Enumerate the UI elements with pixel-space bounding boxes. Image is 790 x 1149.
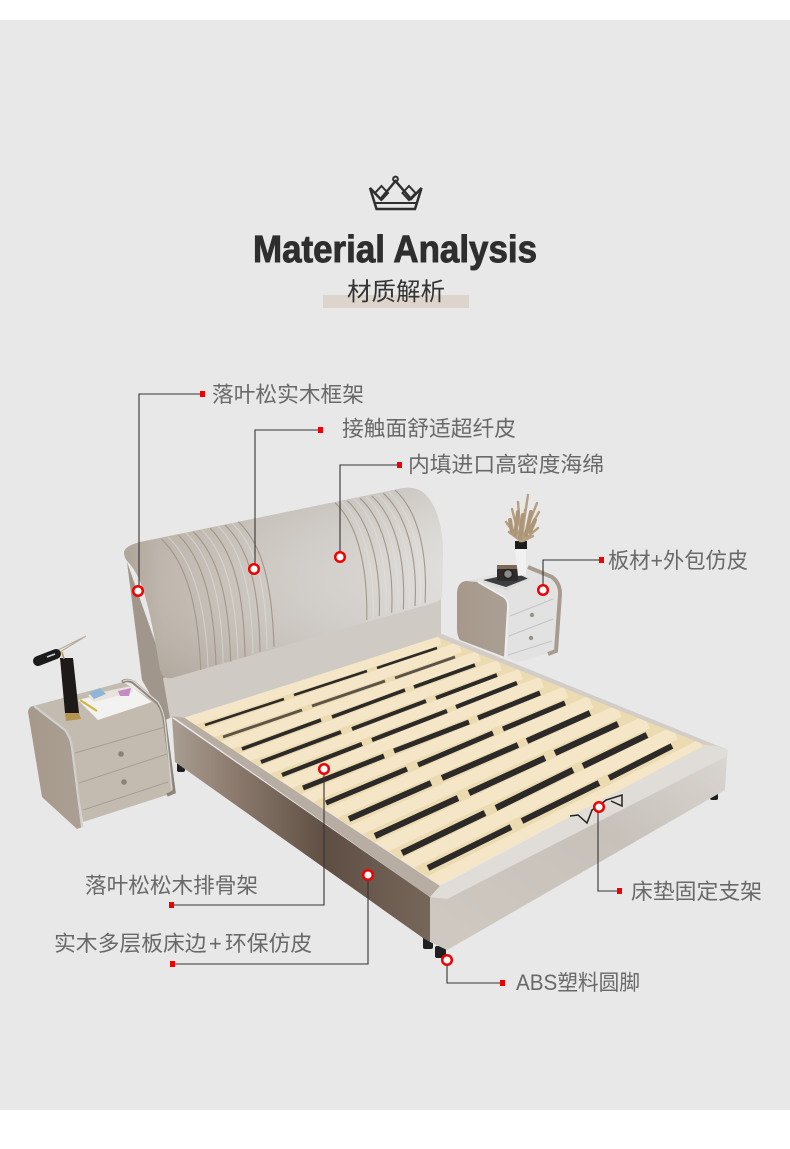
books bbox=[483, 573, 529, 590]
left nightstand bbox=[28, 636, 174, 829]
headboard lower frame bbox=[163, 594, 441, 718]
callout: ABS塑料圆脚 bbox=[442, 955, 640, 995]
nightstand chrome edge bbox=[478, 582, 508, 657]
left side face bbox=[172, 718, 430, 942]
drawer seams bbox=[508, 599, 553, 655]
chrome edges bbox=[34, 706, 82, 827]
title: Material Analysis: Material Analysis bbox=[253, 229, 537, 271]
books bbox=[78, 687, 152, 720]
callout: 内填进口高密度海绵 bbox=[335, 452, 604, 562]
drawer handles bbox=[529, 613, 534, 640]
front side face bbox=[430, 755, 727, 950]
nightstand side bbox=[457, 581, 508, 657]
callout: 床垫固定支架: 床垫固定支架 bbox=[631, 879, 762, 904]
callout: 接触面舒适超纤皮 bbox=[249, 416, 516, 574]
bed feet bbox=[177, 762, 718, 958]
callout: 落叶松实木框架 bbox=[133, 382, 364, 596]
callout: 落叶松实木框架: 落叶松实木框架 bbox=[212, 382, 364, 407]
callout: 内填进口高密度海绵: 内填进口高密度海绵 bbox=[408, 452, 604, 477]
dried pampas bbox=[506, 495, 539, 541]
bed base bbox=[172, 632, 728, 950]
slat gaps bbox=[205, 648, 672, 868]
left rim bbox=[172, 716, 440, 897]
wood base bbox=[185, 637, 705, 885]
callout: 接触面舒适超纤皮: 接触面舒适超纤皮 bbox=[342, 416, 516, 441]
callout: 实木多层板床边+环保仿皮: + bbox=[209, 931, 222, 956]
wooden slats bbox=[185, 640, 702, 884]
callout: 实木多层板床边+环保仿皮: 环保仿皮 bbox=[225, 931, 312, 956]
table lamp bbox=[38, 636, 86, 721]
slatted wooden bed frame bbox=[185, 637, 705, 885]
drawer seams bbox=[75, 727, 168, 810]
subtitle: 材质解析: 材质解析 bbox=[347, 278, 445, 306]
right nightstand bbox=[457, 495, 560, 662]
vase bbox=[515, 541, 527, 576]
icon: crown bbox=[370, 177, 422, 209]
nightstand top and drawers bbox=[33, 682, 173, 822]
callout: ABS塑料圆脚: ABS塑料圆脚 bbox=[516, 970, 640, 995]
stitching: right group bbox=[335, 490, 425, 620]
callout: 实木多层板床边+环保仿皮: 实木多层板床边 bbox=[54, 931, 207, 956]
nightstand top and drawers bbox=[460, 568, 557, 662]
mattress retaining bracket bbox=[570, 795, 622, 823]
nightstand back rim bbox=[528, 567, 560, 654]
callout: 板材+外包仿皮 bbox=[538, 548, 748, 595]
callout: 落叶松松木排骨架: 落叶松松木排骨架 bbox=[85, 873, 258, 898]
stitching: left group bbox=[162, 522, 274, 670]
headboard cushion bbox=[124, 488, 443, 678]
headboard back panel bbox=[127, 562, 175, 720]
subtitle highlight bar bbox=[323, 295, 469, 308]
nightstand side bbox=[28, 706, 82, 829]
camera bbox=[497, 565, 518, 581]
drawer handles bbox=[118, 751, 127, 785]
stitching highlights bbox=[168, 492, 420, 668]
front rim bbox=[430, 745, 728, 899]
callout: 实木多层板床边+环保仿皮 bbox=[54, 870, 373, 967]
callout: 落叶松松木排骨架 bbox=[85, 764, 329, 908]
callout: 板材+外包仿皮: 板材+外包仿皮 bbox=[608, 548, 748, 573]
far side rim bbox=[437, 632, 728, 750]
callout: 床垫固定支架 bbox=[594, 802, 762, 904]
